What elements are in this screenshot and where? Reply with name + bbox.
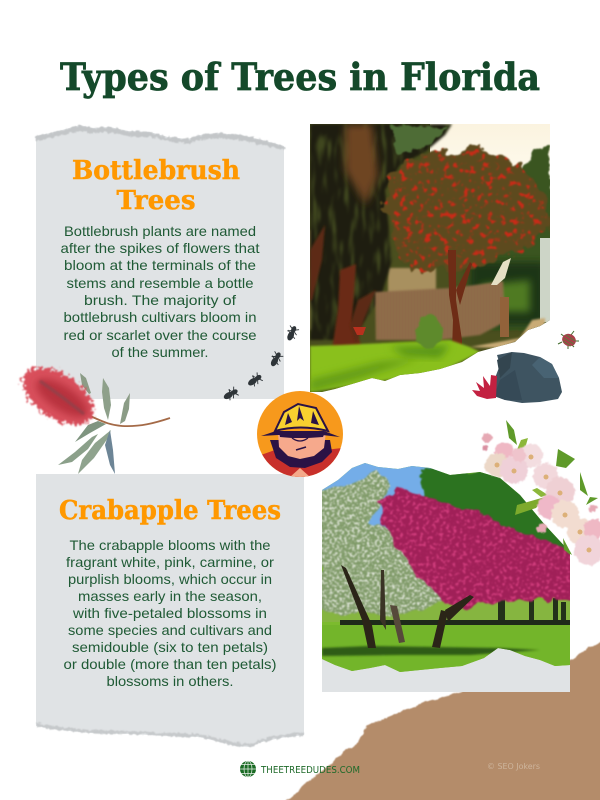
body text: Bottlebrush plants are named [64, 223, 256, 239]
fence [375, 281, 505, 340]
website text: THEETREEDUDES.COM [260, 765, 360, 776]
photo: crabapple trees in park [318, 462, 576, 675]
grass [310, 340, 480, 392]
orange circle [257, 391, 343, 477]
body text: The crabapple blooms with the [70, 537, 271, 553]
red pot [353, 327, 366, 335]
flower head [12, 356, 104, 436]
dark hedge band [340, 620, 570, 625]
distant trunks [498, 598, 566, 622]
siding [540, 238, 550, 322]
icon: globe [240, 761, 256, 777]
distant lawn [322, 600, 570, 622]
heading: Bottlebrush [72, 155, 240, 186]
body text: fragrant white, pink, carmine, or [66, 554, 274, 570]
flower centres [494, 454, 592, 552]
ant 3 [246, 372, 264, 389]
body text: with five-petaled blossoms in [72, 605, 267, 621]
shades under brim [280, 435, 324, 438]
body text: purplish blooms, which occur in [68, 571, 272, 587]
flower shading [30, 372, 94, 424]
body text: red or scarlet over the course [64, 327, 257, 343]
tree shadows [322, 646, 540, 656]
paper strip under crabapple photo [322, 640, 570, 692]
footer: website [240, 761, 360, 777]
icon: rock [494, 352, 562, 403]
body text [60, 223, 260, 360]
body text: after the spikes of flowers that [60, 240, 260, 256]
icon: red coral sprig [472, 375, 497, 399]
body text: masses early in the season, [78, 588, 262, 604]
logo badge [255, 391, 345, 480]
nose and mouth [292, 438, 308, 441]
ant 4 [222, 386, 240, 402]
leaves [506, 420, 598, 555]
sky [322, 463, 442, 530]
shirt [262, 448, 340, 477]
leaves [58, 373, 130, 474]
body text: stems and resemble a bottle [66, 275, 254, 291]
illustration: pink blossom branch [482, 420, 600, 565]
illustration: bottlebrush flower sprig [12, 356, 170, 474]
sky [430, 124, 550, 194]
shrub [416, 315, 442, 349]
body text: brush. The majority of [84, 292, 236, 308]
body text: some species and cultivars and [68, 622, 272, 638]
stem [90, 416, 170, 426]
body text: bottlebrush cultivars bloom in [64, 309, 256, 325]
body text: of the summer. [112, 344, 208, 360]
palm fronds [310, 124, 452, 340]
body text [64, 537, 276, 689]
white bird of paradise leaf [491, 258, 511, 285]
icon: beetle [558, 331, 579, 349]
ant trail [222, 324, 300, 402]
far foliage right [470, 146, 550, 330]
torn edge shading [36, 723, 304, 747]
white tree [318, 472, 445, 615]
body text: semidouble (six to ten petals) [72, 639, 268, 655]
building behind [386, 266, 438, 292]
tree trunk [448, 250, 462, 351]
kraft paper corner [285, 636, 600, 800]
body text: blossoms in others. [106, 673, 234, 689]
hat brim [261, 431, 340, 437]
paper background [36, 474, 304, 747]
tree canopy [382, 148, 550, 270]
heading line 2: Trees [116, 185, 196, 216]
beard [270, 440, 332, 468]
panel: bottlebrush text [36, 125, 284, 399]
hat dome [275, 404, 328, 431]
paper background [36, 125, 284, 399]
path [470, 318, 545, 348]
blossoms [482, 433, 600, 565]
photo: bottlebrush tree garden [310, 124, 550, 392]
heading: Crabapple Trees [59, 496, 281, 526]
title: Types of Trees in Florida [60, 55, 540, 99]
body text: bloom at the terminals of the [64, 257, 256, 273]
palm trunks [332, 264, 362, 350]
magenta tree [378, 488, 576, 608]
copyright: © SEO Jokers [487, 762, 540, 771]
torn edge shading [36, 125, 284, 150]
body text: or double (more than ten petals) [64, 656, 276, 672]
green background tree [420, 466, 570, 560]
grass [322, 625, 570, 675]
flower core [40, 381, 84, 414]
ant 2 [268, 350, 284, 368]
trunks [341, 565, 376, 648]
face [278, 435, 326, 459]
ant 1 [284, 324, 300, 342]
panel: crabapple text [36, 474, 304, 747]
